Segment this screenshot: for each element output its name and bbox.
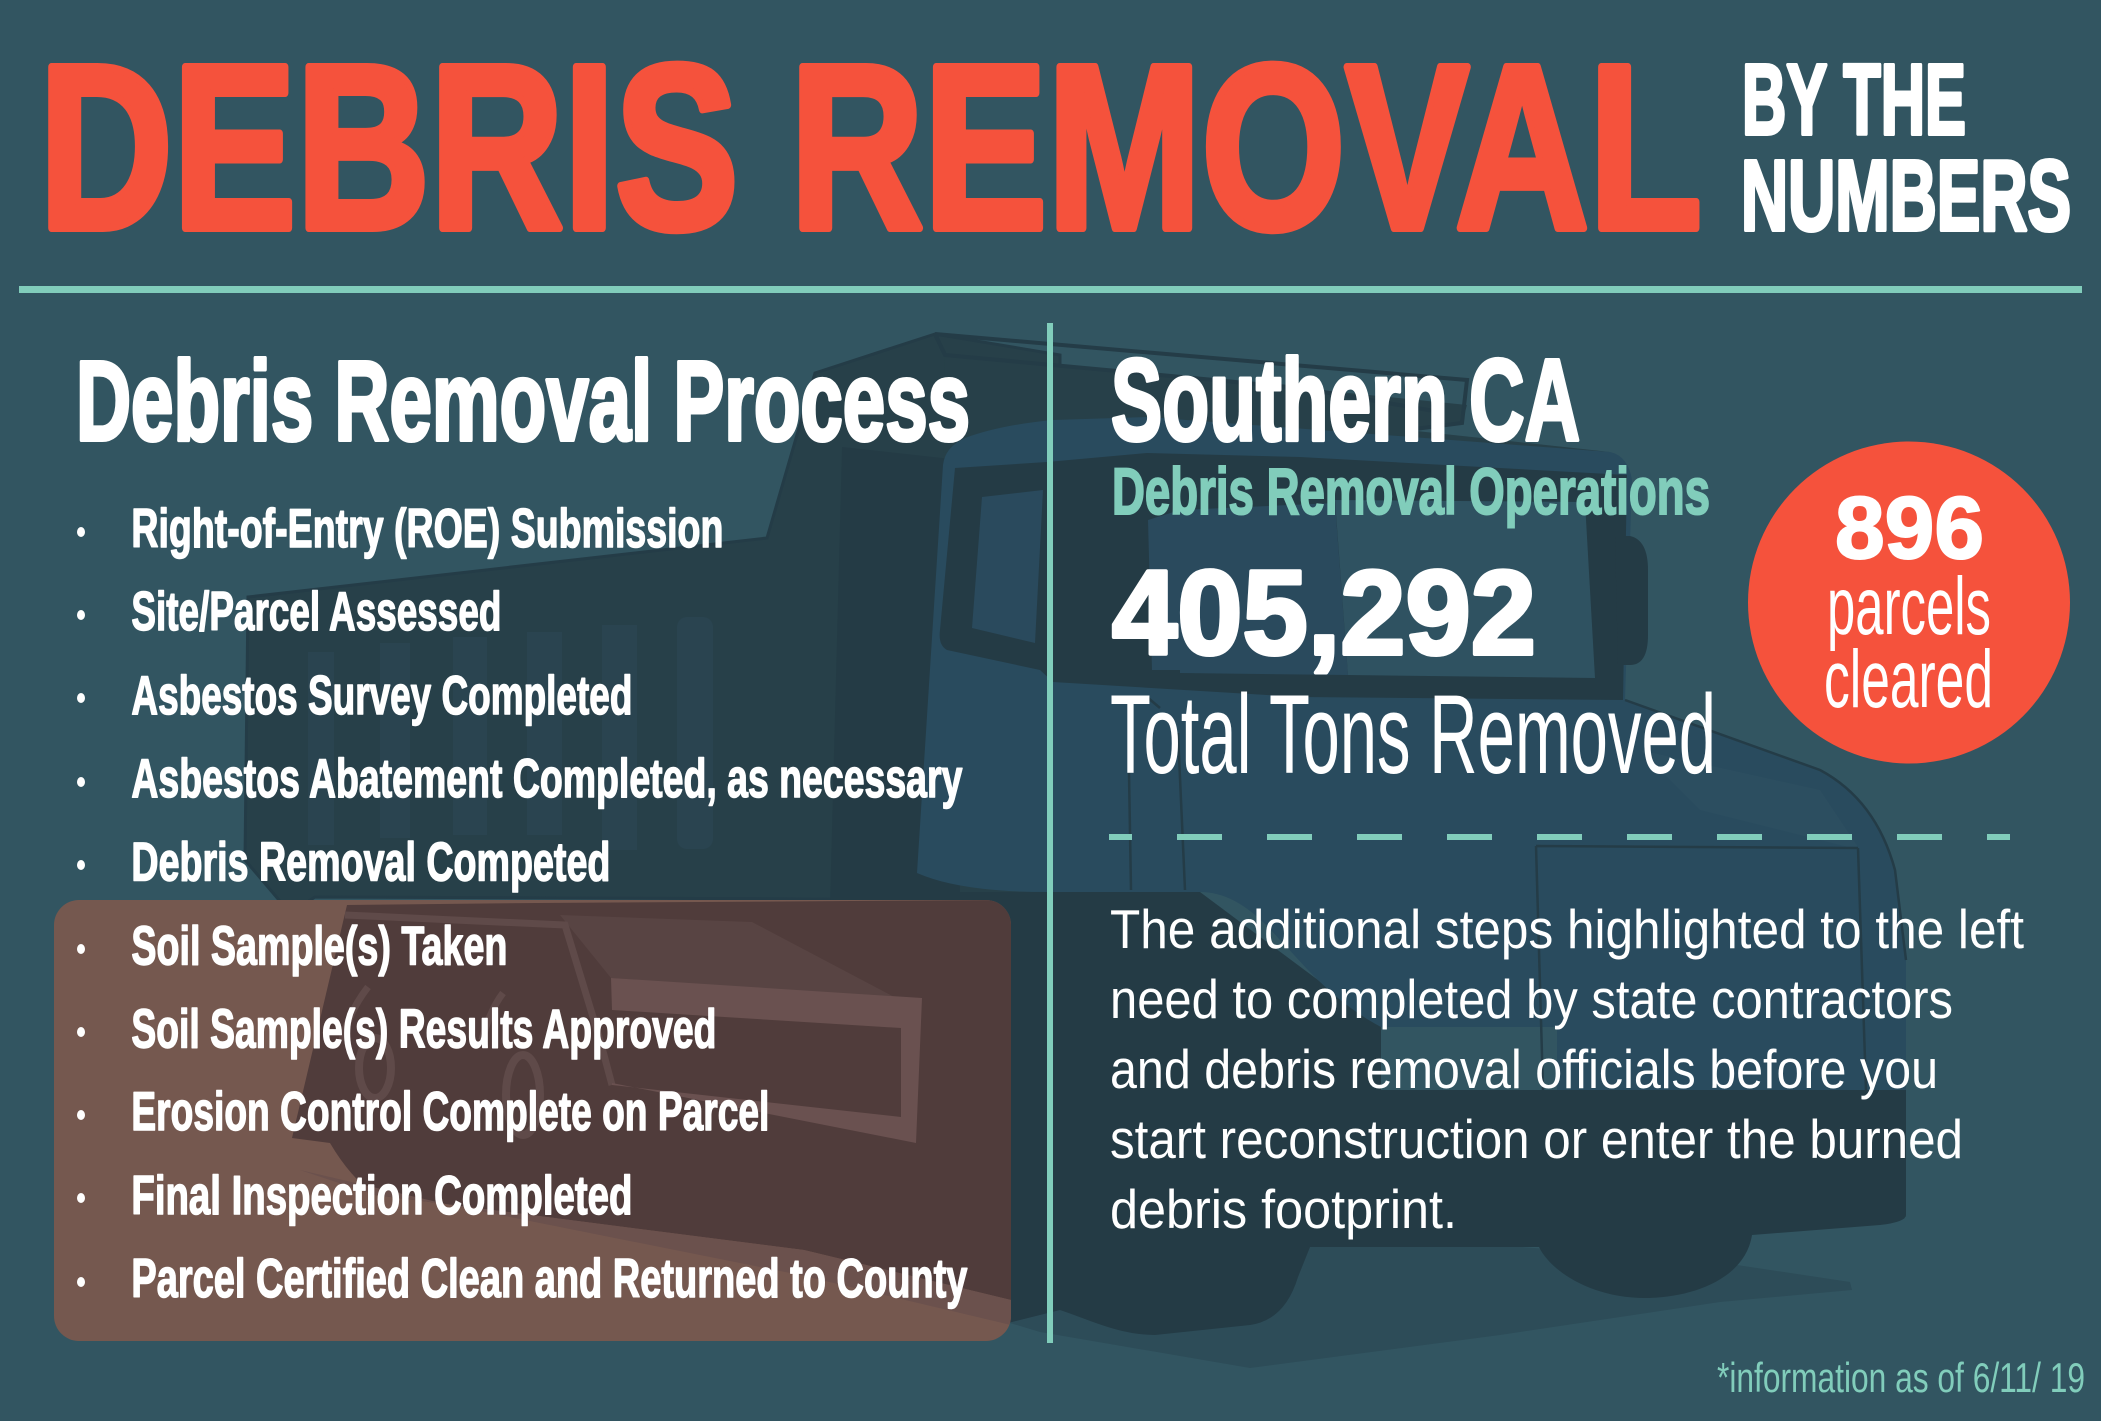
list item 1	[77, 498, 723, 559]
panel: highlighted remaining steps	[54, 900, 1011, 1341]
column divider	[1047, 323, 1053, 1343]
bumper plate	[611, 978, 922, 1143]
windshield right pane	[1335, 500, 1595, 678]
list item 7	[77, 998, 716, 1060]
upper tone	[560, 915, 900, 1000]
subtitle: BY THE	[1742, 44, 1966, 156]
stat label: Total Tons Removed	[1110, 672, 1716, 797]
side window	[972, 490, 1043, 643]
list item 10	[77, 1248, 968, 1309]
list item 8	[77, 1081, 769, 1142]
illustration: dump truck background	[245, 334, 1906, 1368]
list item 8: Erosion Control Complete on Parcel	[131, 1081, 769, 1142]
list item 3	[77, 665, 632, 726]
explanatory text: The additional steps highlighted to the left	[1110, 898, 2024, 960]
process list	[77, 498, 968, 1309]
callout: parcels cleared: cleared	[1824, 634, 1993, 725]
hub highlights	[342, 987, 503, 1040]
list item 6: Soil Sample(s) Taken	[131, 916, 507, 976]
explanatory text: need to completed by state contractors	[1110, 968, 1953, 1030]
truck silhouette in panel	[292, 900, 1011, 1300]
explanatory text	[1110, 898, 2024, 1240]
list item 4: Asbestos Abatement Completed, as necessary	[131, 748, 963, 809]
side mirror	[1615, 536, 1648, 665]
explanatory text: debris footprint.	[1110, 1178, 1457, 1240]
list item 5: Debris Removal Competed	[131, 832, 610, 892]
list item 9: Final Inspection Completed	[131, 1165, 632, 1226]
dark side band	[830, 447, 960, 905]
list item 4	[77, 748, 963, 809]
explanatory text: and debris removal officials before you	[1110, 1038, 1938, 1100]
list item 5	[77, 832, 610, 892]
bed ribs	[308, 617, 713, 850]
subheading: operations: Debris Removal Operations	[1112, 454, 1710, 528]
heading: Southern CA: Southern CA	[1111, 335, 1580, 465]
list item 6	[77, 916, 507, 976]
windshield left pane	[1148, 503, 1348, 675]
callout: parcels cleared: 896	[1835, 478, 1984, 577]
list item 10: Parcel Certified Clean and Returned to County	[131, 1248, 968, 1309]
grille panel	[1381, 1027, 1557, 1090]
lower body and wheels	[900, 892, 1906, 1335]
ground shadow	[1000, 1230, 1852, 1368]
list item 7: Soil Sample(s) Results Approved	[131, 998, 716, 1060]
subtitle	[1741, 44, 2071, 252]
list item 3: Asbestos Survey Completed	[131, 665, 632, 726]
callout: parcels cleared: parcels	[1827, 561, 1991, 652]
dashed divider	[1109, 834, 2010, 840]
lower swoosh	[300, 1170, 1011, 1325]
list item 2: Site/Parcel Assessed	[131, 581, 501, 642]
canopy top lines	[935, 334, 1467, 430]
wheel hub rings	[359, 1038, 391, 1098]
heading: process: Debris Removal Process	[76, 338, 970, 464]
canopy underside	[943, 355, 1610, 453]
stat: total tons: 405,292	[1112, 546, 1536, 680]
truck cab and hood	[917, 417, 1906, 1090]
tailgate frame	[345, 915, 612, 1085]
hood highlight	[1640, 750, 1860, 850]
title rule	[19, 286, 2082, 293]
title: DEBRIS REMOVAL	[39, 16, 1702, 278]
list item 2	[77, 581, 501, 642]
list item 1: Right-of-Entry (ROE) Submission	[131, 498, 723, 559]
explanatory text: start reconstruction or enter the burned	[1110, 1108, 1963, 1170]
cab window frame	[940, 453, 1627, 700]
body panel lines	[1129, 697, 1906, 1090]
truck dump bed	[245, 334, 1060, 913]
list item 9	[77, 1165, 632, 1226]
callout: parcels cleared	[1748, 442, 2070, 764]
